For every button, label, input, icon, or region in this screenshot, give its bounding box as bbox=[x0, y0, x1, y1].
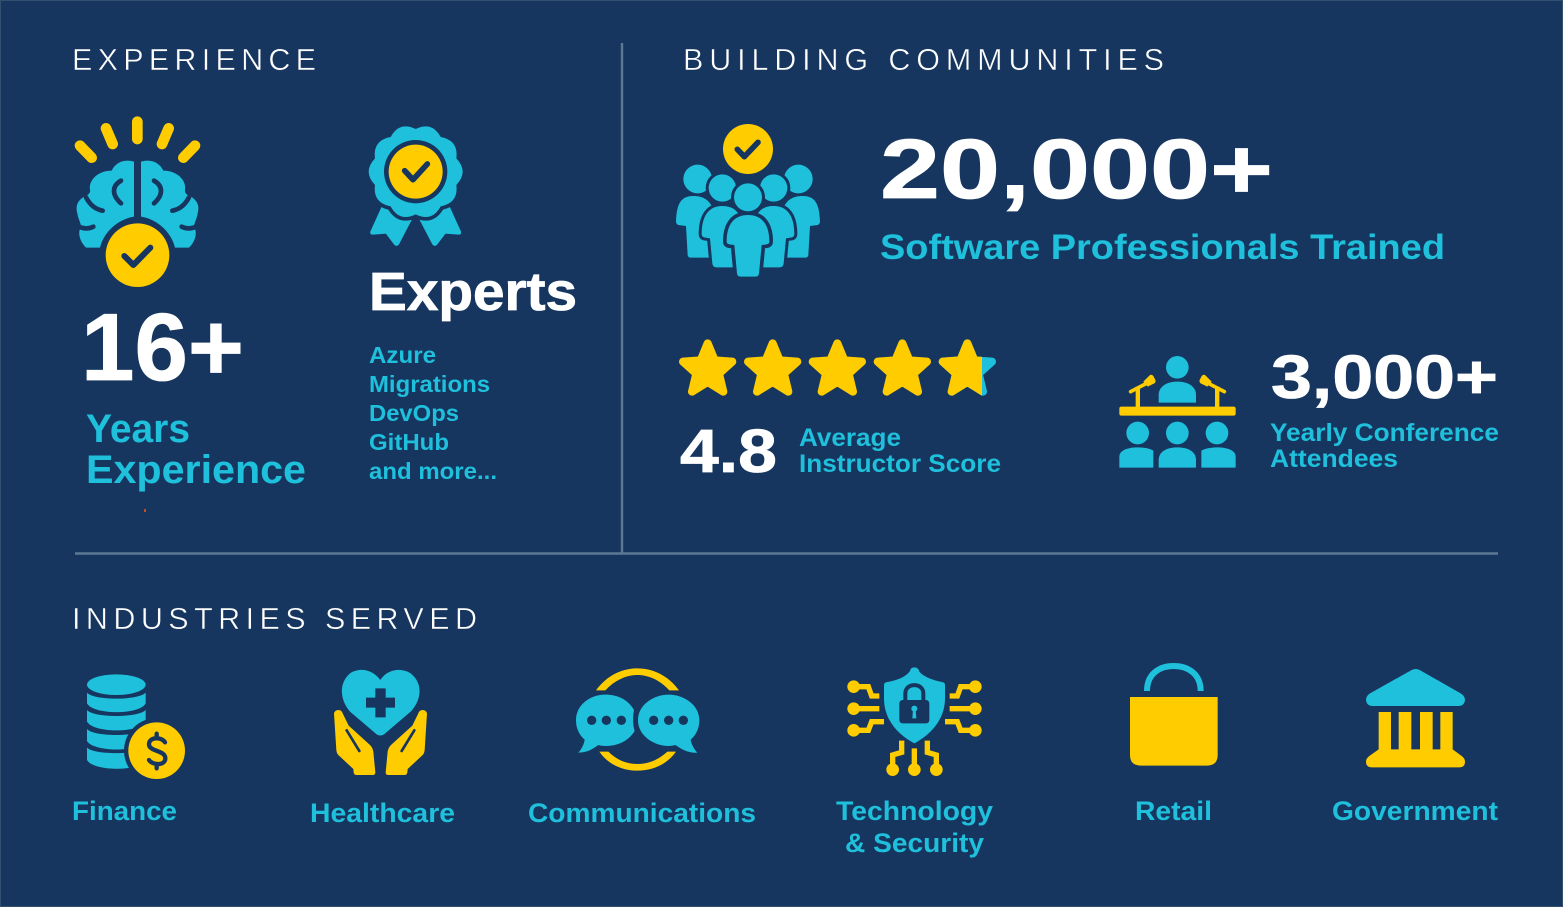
label: government: Government bbox=[1332, 796, 1498, 826]
label: technology and security: Technology bbox=[836, 796, 993, 826]
label: years experience: Years bbox=[86, 407, 190, 451]
stat: 3,000+: 3,000+ bbox=[1271, 343, 1498, 411]
heading: building communities: BUILDING COMMUNITIES bbox=[683, 43, 1164, 77]
stat: 16+: 16+ bbox=[81, 294, 244, 401]
label: yearly conference attendees bbox=[1270, 419, 1499, 473]
label: yearly conference attendees: Attendees bbox=[1270, 445, 1398, 473]
label: technology and security bbox=[836, 796, 993, 858]
icon: finance coins bbox=[87, 674, 189, 783]
label: software professionals trained: Software Professionals Trained bbox=[880, 228, 1445, 267]
label: retail: Retail bbox=[1135, 796, 1212, 826]
list: areas of expertise: Migrations bbox=[369, 371, 490, 397]
list: areas of expertise bbox=[369, 342, 497, 484]
label: average instructor score: Instructor Score bbox=[799, 450, 1001, 478]
label: technology and security: & Security bbox=[845, 828, 984, 858]
label: finance: Finance bbox=[72, 796, 177, 826]
list: areas of expertise: Azure bbox=[369, 342, 436, 368]
label: average instructor score bbox=[799, 424, 1001, 478]
heading: industries served: INDUSTRIES SERVED bbox=[72, 602, 477, 636]
label: average instructor score: Average bbox=[799, 424, 901, 452]
panel: building communities bbox=[676, 43, 1499, 485]
icon: retail shopping bag bbox=[1130, 666, 1218, 766]
list: areas of expertise: and more... bbox=[369, 458, 497, 484]
icon: five star rating bbox=[683, 343, 992, 392]
list: areas of expertise: DevOps bbox=[369, 400, 459, 426]
stat: 20,000+: 20,000+ bbox=[880, 122, 1273, 216]
icon: technology and security shield bbox=[847, 667, 982, 776]
heading: experience: EXPERIENCE bbox=[72, 43, 316, 77]
panel: experience bbox=[72, 43, 577, 492]
icon: communications speech bubbles bbox=[576, 668, 699, 771]
panel: industries served bbox=[72, 602, 1498, 858]
icon: healthcare heart and hands bbox=[334, 670, 427, 775]
icon: award ribbon badge bbox=[369, 126, 463, 245]
label: yearly conference attendees: Yearly Conference bbox=[1270, 419, 1499, 447]
icon: government building bbox=[1366, 669, 1465, 767]
icon: brain with check and rays bbox=[77, 122, 198, 287]
label: years experience: Experience bbox=[86, 448, 306, 492]
icon: group of people with check bbox=[676, 124, 820, 277]
list: areas of expertise: GitHub bbox=[369, 429, 449, 455]
icon: conference speaker and audience bbox=[1119, 356, 1236, 468]
heading: experts: Experts bbox=[369, 262, 577, 322]
label: communications: Communications bbox=[528, 798, 756, 828]
stat: 4.8: 4.8 bbox=[680, 417, 777, 485]
label: years experience bbox=[86, 407, 306, 492]
label: healthcare: Healthcare bbox=[310, 798, 455, 828]
